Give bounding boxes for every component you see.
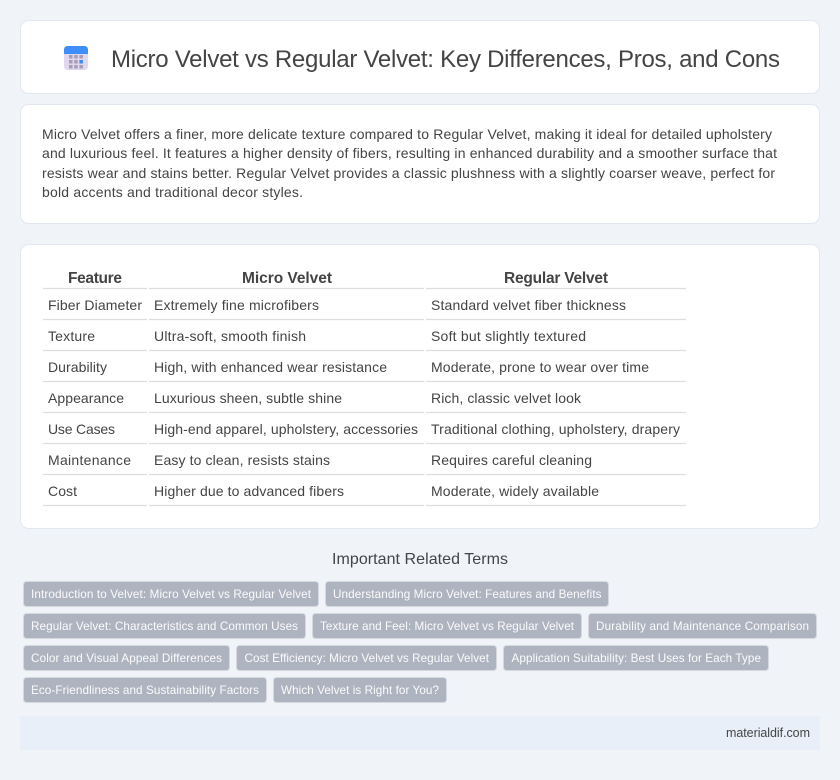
table row: appearance: Rich, classic velvet look — [431, 390, 582, 406]
table row: fiber diameter: Fiber Diameter — [48, 297, 142, 313]
tag: color and visual appeal — [24, 646, 230, 670]
tag: texture and feel: Texture and Feel: Micro Velvet vs Regular Velvet — [320, 620, 575, 633]
table row: maintenance: Requires careful cleaning — [431, 452, 592, 468]
tag: regular velvet characteristics — [24, 614, 306, 638]
tag: cost efficiency: Cost Efficiency: Micro Velvet vs Regular Velvet — [244, 652, 490, 665]
table row: cost: Moderate, widely available — [431, 483, 599, 499]
tag: color and visual appeal: Color and Visual Appeal Differences — [31, 652, 222, 665]
tag: eco-friendliness: Eco-Friendliness and Sustainability Factors — [31, 684, 259, 697]
text block: introduction paragraph: resists wear and stains better. Regular Velvet provides a classic plushness with a slightly coarser weave, perfect for — [42, 165, 775, 181]
table row: texture: Ultra-soft, smooth finish — [154, 328, 306, 344]
icon: calendar grid — [64, 46, 88, 70]
tag: which velvet is right: Which Velvet is Right for You? — [281, 684, 439, 697]
table row: use cases — [43, 421, 686, 444]
table row: maintenance — [43, 452, 686, 474]
tag: durability and maintenance: Durability and Maintenance Comparison — [596, 620, 809, 633]
table row: cost — [43, 483, 686, 506]
table row: durability — [43, 359, 686, 382]
table row: fiber diameter: Standard velvet fiber thickness — [431, 297, 626, 313]
table row: use cases: High-end apparel, upholstery, accessories — [154, 421, 418, 437]
table row: appearance: Luxurious sheen, subtle shine — [154, 390, 342, 406]
footer source text: materialdif.com — [726, 726, 810, 740]
table row: appearance: Appearance — [48, 390, 124, 406]
tag: texture and feel — [312, 614, 582, 638]
table row: fiber diameter: Extremely fine microfibers — [154, 297, 319, 313]
table row: texture — [43, 328, 686, 350]
text block: introduction paragraph: Micro Velvet offers a finer, more delicate texture compared to Regular Velvet, making it ideal for detailed upholstery — [42, 126, 772, 142]
heading: important related terms: Important Related Terms — [332, 551, 508, 568]
title: Micro Velvet vs Regular Velvet: Key Differences, Pros, and Cons — [111, 46, 780, 73]
table row: fiber diameter — [43, 297, 686, 320]
text block: introduction paragraph — [42, 126, 777, 200]
table header row: Feature — [68, 270, 122, 287]
table row: texture: Soft but slightly textured — [431, 328, 586, 344]
tag: cost efficiency — [236, 646, 496, 670]
panel: introduction — [20, 104, 820, 224]
table row: texture: Texture — [48, 328, 95, 344]
tag: application suitability: Application Suitability: Best Uses for Each Type — [512, 652, 761, 665]
tag: introduction to velvet: Introduction to Velvet: Micro Velvet vs Regular Velvet — [31, 588, 312, 601]
table header row: Micro Velvet — [242, 270, 332, 287]
table row: cost: Cost — [48, 483, 77, 499]
tag: durability and maintenance — [588, 614, 816, 638]
table row: durability: Durability — [48, 359, 107, 375]
table header row: Regular Velvet — [504, 270, 608, 287]
tag: which velvet is right — [274, 678, 446, 702]
tag group: related terms — [24, 582, 816, 702]
panel: comparison table — [20, 244, 820, 528]
table row: use cases: Use Cases — [48, 421, 115, 437]
table row: use cases: Traditional clothing, upholstery, drapery — [431, 421, 680, 437]
table row: maintenance: Maintenance — [48, 452, 131, 468]
tag: understanding micro velvet — [326, 582, 608, 606]
tag: application suitability — [504, 646, 768, 670]
table row: durability: Moderate, prone to wear over time — [431, 359, 649, 375]
text block: introduction paragraph: and luxurious feel. It features a higher density of fibers, resulting in enhanced durability and a smoother surface that — [42, 145, 777, 161]
tag: regular velvet characteristics: Regular Velvet: Characteristics and Common Uses — [31, 620, 298, 633]
tag: introduction to velvet — [24, 582, 318, 606]
tag: understanding micro velvet: Understanding Micro Velvet: Features and Benefits — [333, 588, 602, 601]
text block: introduction paragraph: bold accents and traditional decor styles. — [42, 184, 303, 200]
table row: appearance — [43, 390, 686, 412]
table header row — [43, 270, 686, 288]
table row: durability: High, with enhanced wear resistance — [154, 359, 387, 375]
panel: title header — [20, 20, 820, 94]
tag: eco-friendliness — [24, 678, 266, 702]
table row: maintenance: Easy to clean, resists stains — [154, 452, 330, 468]
footer bar — [20, 716, 820, 750]
table row: cost: Higher due to advanced fibers — [154, 483, 344, 499]
